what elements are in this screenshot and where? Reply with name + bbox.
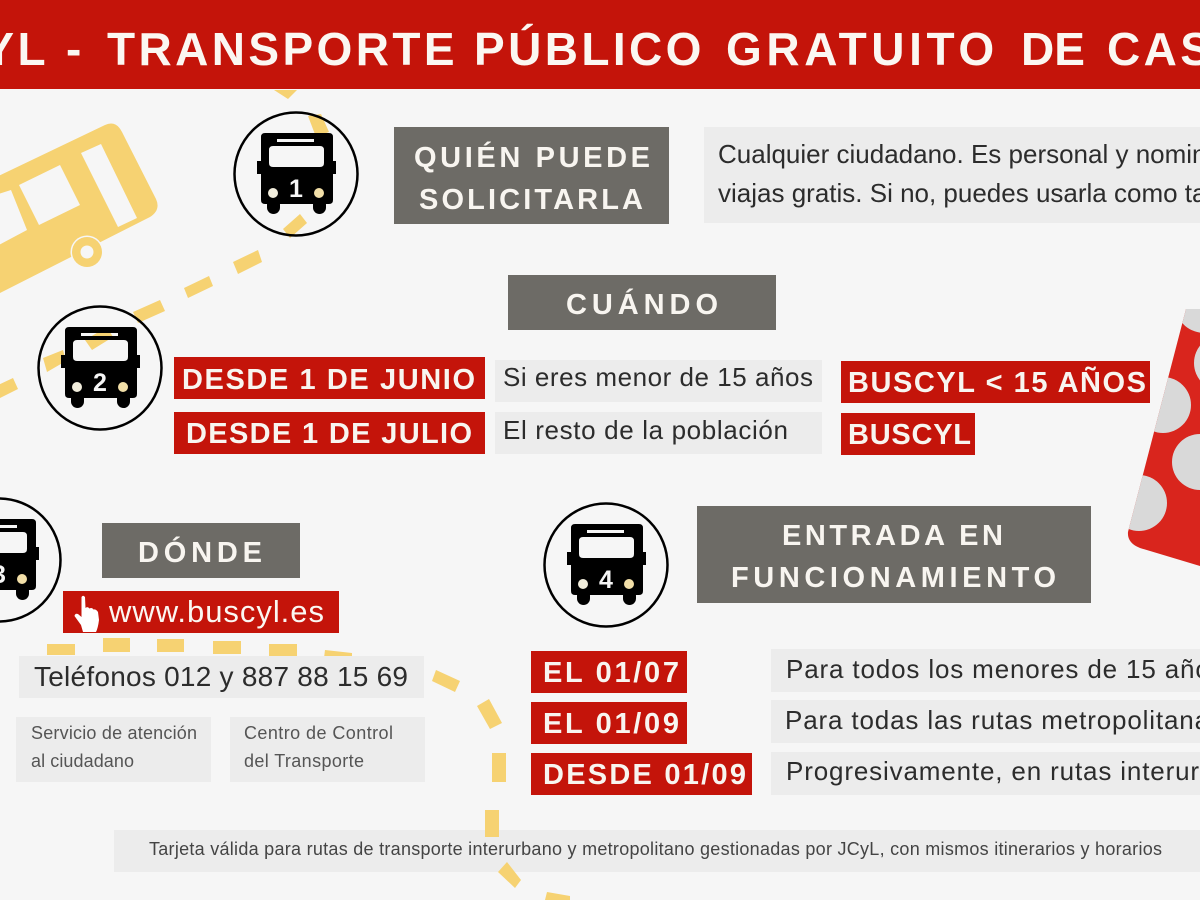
heading: entrada en funcionamiento: FUNCIONAMIENTO xyxy=(731,562,1056,594)
row: el 01/09: EL 01/09 xyxy=(543,708,679,740)
note: centro de control: del Transporte xyxy=(244,751,364,771)
row: desde 1 de julio: DESDE 1 DE JULIO xyxy=(186,418,472,450)
yellow bus illustration xyxy=(0,124,158,298)
row: desde 1 de julio: BUSCYL xyxy=(848,419,971,451)
title banner: - xyxy=(66,23,81,75)
row: desde 1 de julio: El resto de la población xyxy=(503,415,788,445)
row: desde 1 de julio xyxy=(174,412,975,455)
heading: quién puede solicitarla: QUIÉN PUEDE xyxy=(414,140,650,174)
row: desde 1 de junio xyxy=(174,357,1150,403)
footnote: Tarjeta válida para rutas de transporte interurbano y metropolitano gestionadas por JCyL, con mismos itinerarios y horarios xyxy=(149,839,1162,859)
text: quién puede solicitarla xyxy=(704,127,1200,223)
row: desde 01/09: DESDE 01/09 xyxy=(543,759,746,791)
heading: dónde: DÓNDE xyxy=(138,535,262,569)
web link xyxy=(63,591,339,633)
note: servicio de atención: al ciudadano xyxy=(31,751,134,771)
row: desde 01/09 xyxy=(531,752,1200,795)
phones: Teléfonos 012 y 887 88 15 69 xyxy=(34,661,408,692)
title banner: TRANSPORTE xyxy=(107,23,458,75)
red ticket illustration xyxy=(1128,309,1200,566)
row: desde 1 de junio: DESDE 1 DE JUNIO xyxy=(182,364,475,396)
title banner: DE xyxy=(1021,23,1085,75)
title banner: PÚBLICO xyxy=(474,23,705,75)
row: el 01/09 xyxy=(531,700,1200,744)
step 2 bus icon: 2 xyxy=(93,369,107,397)
row: el 01/07 xyxy=(531,649,1200,693)
dashed route: lower xyxy=(47,638,506,782)
title banner xyxy=(0,0,1200,89)
row: desde 1 de junio: BUSCYL < 15 AÑOS xyxy=(848,365,1146,399)
step 1 bus icon xyxy=(234,112,358,236)
step 4 bus icon xyxy=(544,504,668,626)
heading: quién puede solicitarla xyxy=(394,127,669,224)
note: servicio de atención: Servicio de atención xyxy=(31,723,197,743)
phones xyxy=(19,656,424,698)
heading: dónde xyxy=(102,523,300,578)
note: centro de control xyxy=(230,717,425,782)
note: centro de control: Centro de Control xyxy=(244,723,393,743)
heading: cuándo: CUÁNDO xyxy=(566,287,718,321)
heading: entrada en funcionamiento: ENTRADA EN xyxy=(782,520,1003,552)
row: el 01/07: EL 01/07 xyxy=(543,657,679,689)
web link: www.buscyl.es xyxy=(108,594,324,629)
step 1 bus icon: 1 xyxy=(289,175,303,203)
row: desde 1 de junio: Si eres menor de 15 años xyxy=(503,362,813,392)
step 2 bus icon xyxy=(38,306,162,430)
heading: cuándo xyxy=(508,275,776,330)
step 3 bus icon xyxy=(0,498,60,622)
step 4 bus icon: 4 xyxy=(599,566,613,594)
dashed route: upper xyxy=(0,90,329,400)
title banner: GRATUITO xyxy=(726,23,999,75)
heading: quién puede solicitarla: SOLICITARLA xyxy=(419,184,643,216)
footnote xyxy=(114,830,1200,872)
dashed route: bottom xyxy=(485,810,570,900)
note: servicio de atención xyxy=(16,717,211,782)
heading: entrada en funcionamiento xyxy=(697,506,1091,603)
